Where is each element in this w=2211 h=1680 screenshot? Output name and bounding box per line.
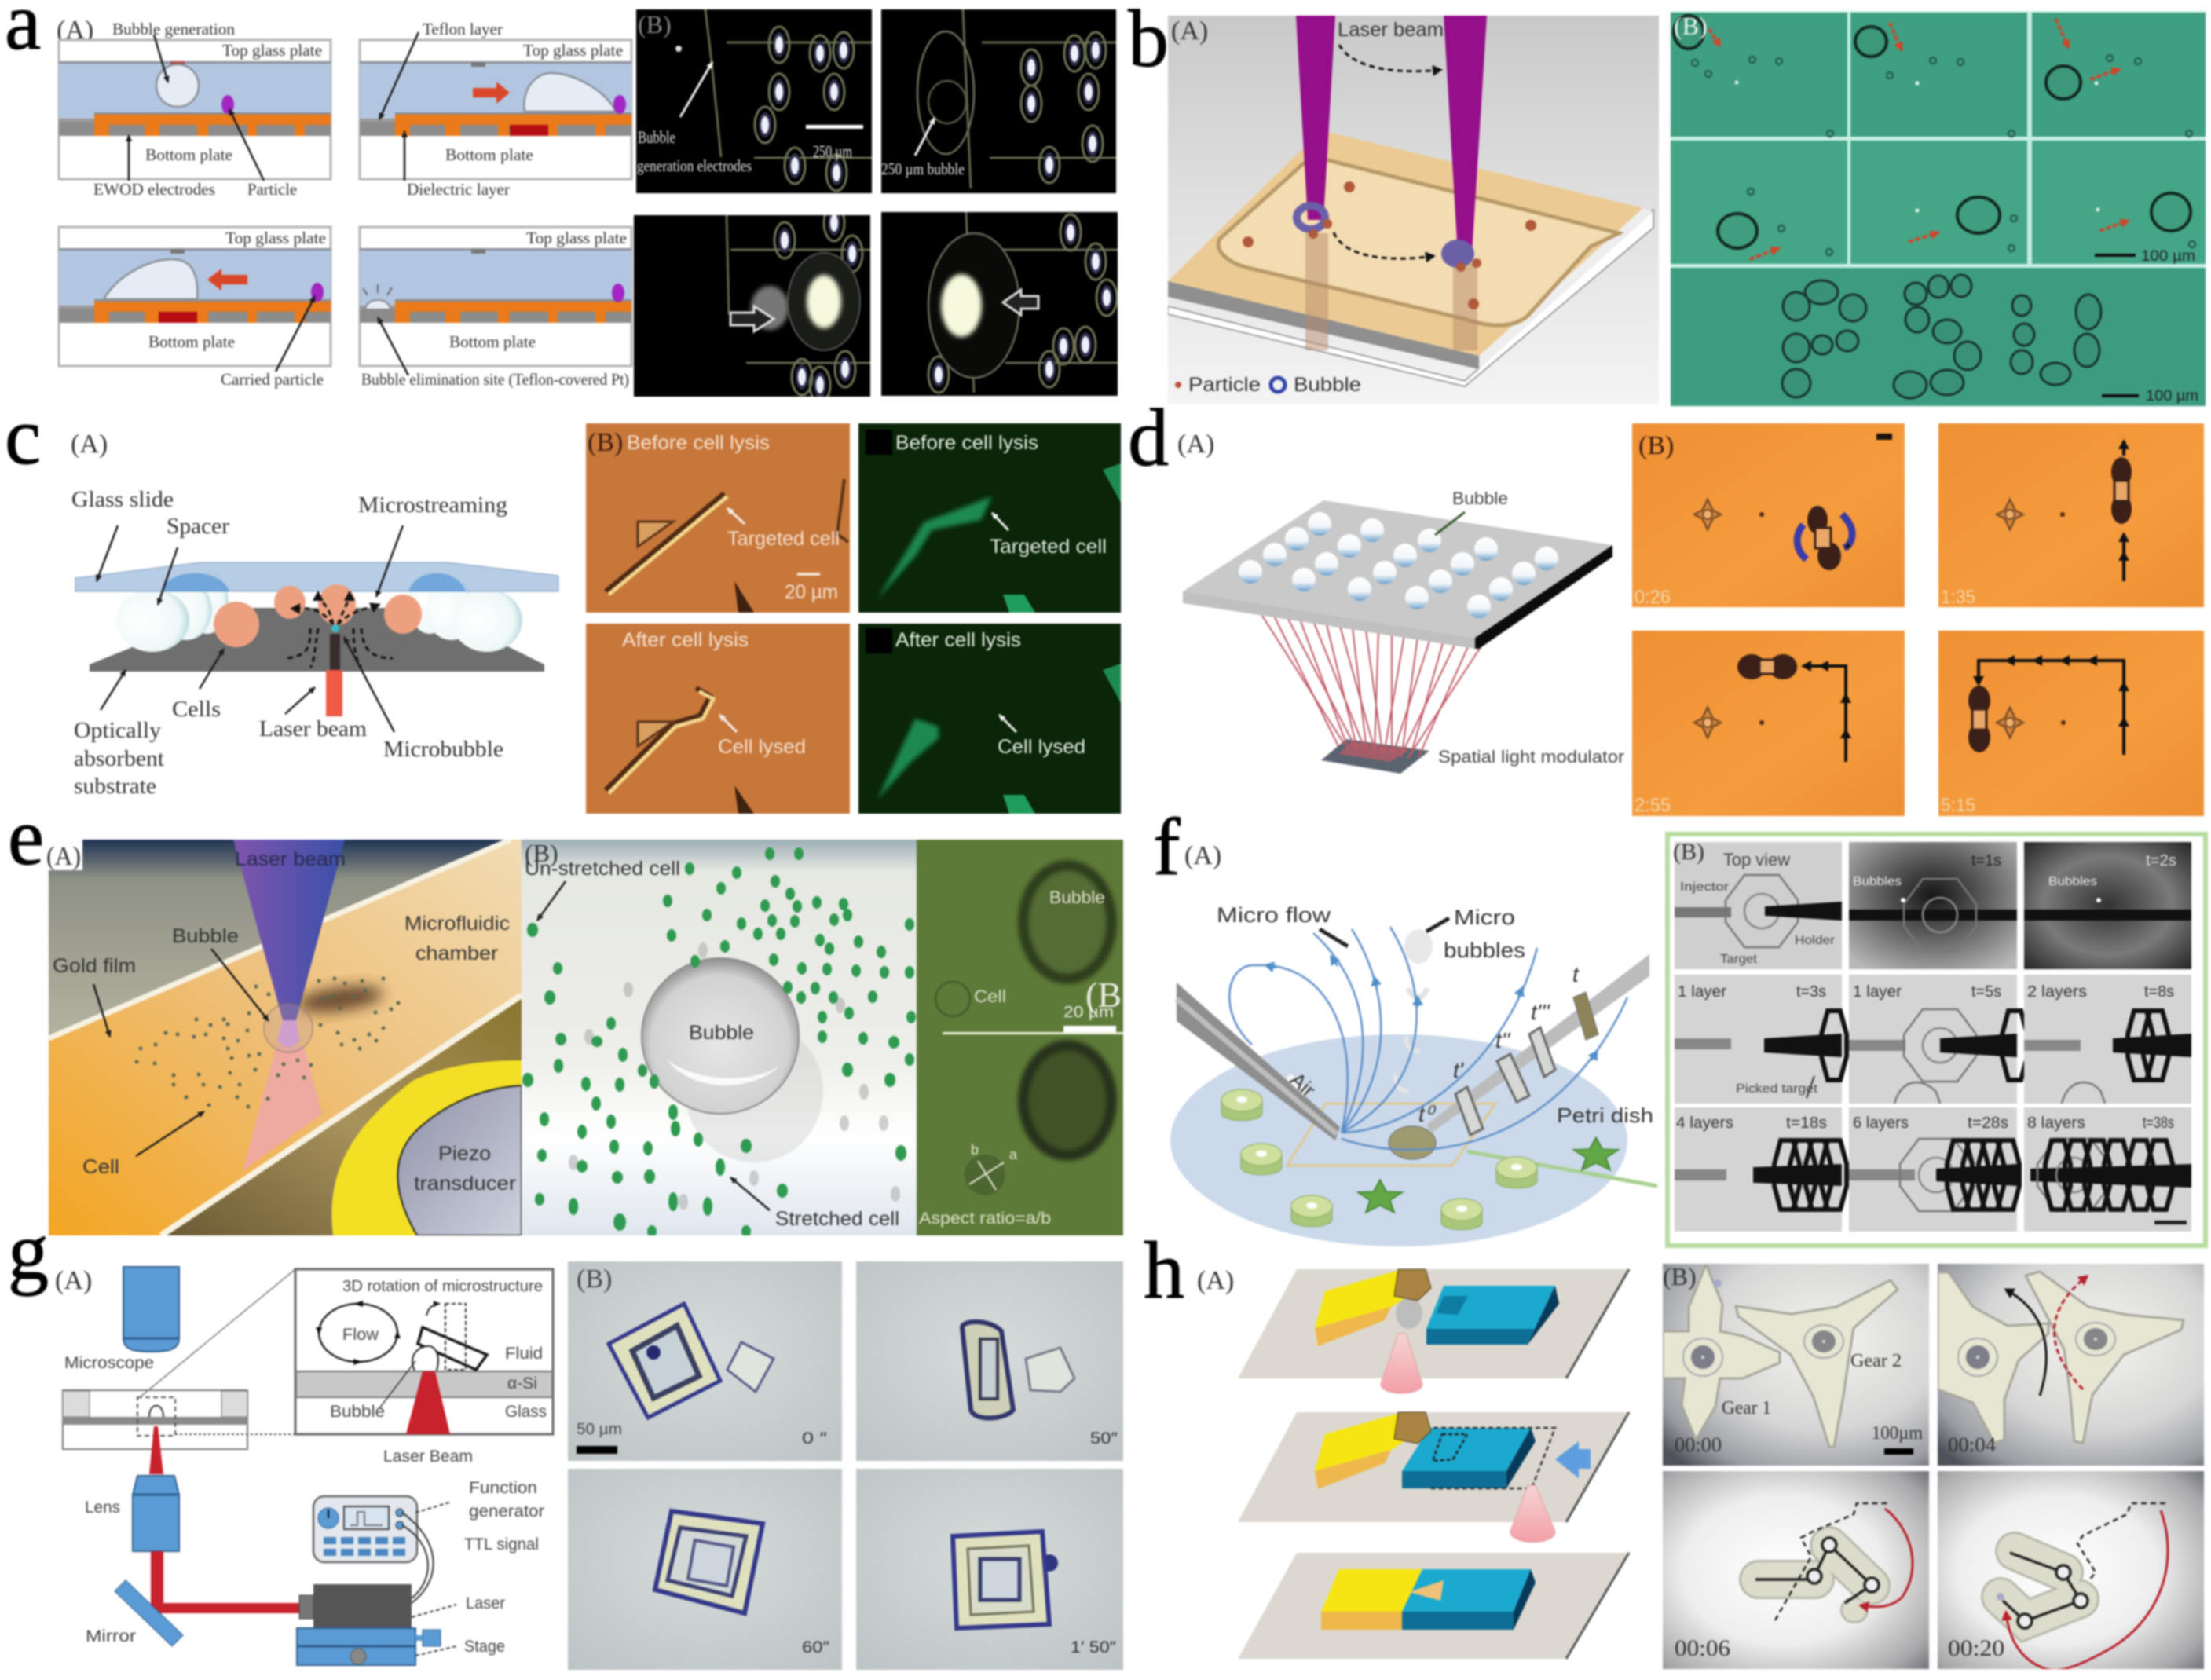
- schematic: bubble moving right: [360, 20, 631, 199]
- schematic: bubble generation: Bubble generation: [112, 20, 235, 38]
- photo: aspect ratio microscopy: b: [971, 1142, 979, 1158]
- letter h: h: [1144, 1225, 1184, 1316]
- schematic: microstreaming: [71, 488, 558, 799]
- schematic: microscope setup: Mirror: [86, 1627, 136, 1645]
- photo: after lysis fluorescence: Cell lysed: [998, 736, 1085, 758]
- schematic: bubble generation: Bottom plate: [145, 145, 232, 164]
- photo: aspect ratio microscopy: Aspect ratio=a/b: [919, 1210, 1051, 1228]
- photo: aspect ratio microscopy: (B: [1085, 975, 1122, 1015]
- frame: 8 layers t=38s: [2024, 1107, 2191, 1232]
- photo: before lysis brightfield: Before cell lysis: [627, 432, 770, 454]
- schematic: microstreaming: Glass slide: [71, 488, 174, 512]
- schematic: microstreaming: substrate: [74, 774, 156, 799]
- schematic: bubble moving left: Carried particle: [221, 370, 324, 389]
- photo: aspect ratio microscopy: Cell: [974, 986, 1006, 1006]
- panel a: [5, 0, 1118, 403]
- inset: 3D rotation: Fluid: [505, 1345, 543, 1363]
- frame: 2 layers t=8s: [2024, 975, 2191, 1104]
- photo: 0 seconds: 0 ″: [802, 1429, 828, 1448]
- schematic: assembly step 2: [1238, 1412, 1629, 1543]
- photo: aspect ratio microscopy: a: [1009, 1147, 1018, 1162]
- schematic: acoustic laser chamber: Microfluidic: [404, 913, 510, 935]
- schematic: bubble moving right: Top glass plate: [523, 41, 623, 60]
- frame: t=1s: [1849, 842, 2017, 969]
- frame: 4 layers t=18s: 4 layers: [1676, 1115, 1733, 1132]
- photo: before lysis brightfield: (B): [588, 428, 623, 457]
- frame: top view: Injector: [1680, 880, 1730, 894]
- photo: 1:35 move up: [1937, 422, 2206, 609]
- schematic: assembly step 1: [1238, 1269, 1629, 1393]
- label A: (A): [1197, 1266, 1234, 1295]
- frame: 8 layers t=38s: 8 layers: [2027, 1115, 2085, 1132]
- inset: 3D rotation: α-Si: [507, 1374, 537, 1393]
- frame: top view: Top view: [1723, 850, 1790, 869]
- photo: generation electrodes: Bubble: [638, 127, 675, 147]
- photo: aspect ratio microscopy: [915, 838, 1125, 1237]
- schematic: microscope setup: [63, 1267, 544, 1665]
- photo: gears 00:04: [1936, 1263, 2206, 1467]
- frame: 4 layers t=18s: [1675, 1107, 1847, 1232]
- letter e: e: [8, 792, 44, 882]
- frame: 6 layers t=28s: t=28s: [1968, 1115, 2008, 1132]
- frame: 4 layers t=18s: t=18s: [1786, 1115, 1827, 1132]
- schematic: bubble moving left: Bottom plate: [148, 332, 235, 351]
- schematic: bubble generation: [59, 20, 331, 199]
- photo: gears 00:00: Gear 1: [1722, 1398, 1771, 1418]
- schematic: bubble moving right: Teflon layer: [423, 20, 503, 38]
- schematic: acoustic laser chamber: transducer: [414, 1173, 516, 1195]
- schematic: petri dish pick-up: bubbles: [1444, 939, 1525, 962]
- photo: 1 min 50 seconds: [855, 1468, 1124, 1671]
- schematic: microscope setup: TTL signal: [464, 1535, 539, 1554]
- photo: 2:55 move left: 2:55: [1634, 795, 1671, 816]
- letter g: g: [8, 1206, 49, 1297]
- label A: (A): [55, 1266, 92, 1295]
- schematic: petri dish pick-up: [1170, 903, 1657, 1246]
- letter c: c: [5, 391, 41, 481]
- photo: before lysis brightfield: Targeted cell: [727, 528, 840, 550]
- photo: after lysis brightfield: Cell lysed: [718, 736, 806, 758]
- photo: before lysis fluorescence: [857, 422, 1122, 614]
- photo: gears 00:20: 00:20: [1948, 1635, 2004, 1661]
- schematic: microscope setup: Stage: [464, 1638, 505, 1656]
- inset: 3D rotation: Bubble: [330, 1403, 385, 1421]
- photo: 2:55 move left: [1631, 629, 1906, 818]
- schematic: microstreaming: Spacer: [167, 514, 230, 539]
- schematic: microscope setup: Function: [469, 1479, 537, 1497]
- schematic: bubble elimination: Bottom plate: [449, 332, 536, 351]
- inset: 3D rotation: 3D rotation of microstructure: [342, 1278, 543, 1295]
- photo: generation electrodes: 250 µm: [813, 141, 852, 161]
- schematic: assembly step 3: [1238, 1553, 1629, 1659]
- frame: 1 layer t=5s: [1849, 975, 2027, 1104]
- photo: after lysis brightfield: After cell lysis: [622, 629, 749, 651]
- illustration: cells around bubble: Un-stretched cell: [525, 858, 680, 880]
- photo: 5:15 move down: [1937, 629, 2206, 818]
- schematic: petri dish pick-up: t': [1453, 1058, 1465, 1082]
- schematic: bubble array and SLM: Bubble: [1452, 489, 1508, 508]
- schematic: bubble moving right: Bottom plate: [445, 145, 533, 164]
- photo: 0:26 rotation: [1631, 422, 1906, 609]
- label A: (A): [1171, 16, 1208, 46]
- schematic: bubble elimination: Top glass plate: [526, 229, 627, 247]
- photo: gears 00:00: Gear 2: [1850, 1351, 1902, 1371]
- schematic: microstreaming: Laser beam: [259, 717, 367, 741]
- photo grid: bubble trapping: 100 µm: [2146, 388, 2198, 404]
- photo: 1:35 move up: 1:35: [1941, 587, 1975, 608]
- frame: t=1s: Bubbles: [1853, 875, 1902, 888]
- schematic: microstreaming: Microstreaming: [358, 493, 507, 518]
- panel g: [8, 1206, 1123, 1670]
- schematic: bubble moving left: Top glass plate: [225, 229, 326, 247]
- photo: 50 seconds: [855, 1261, 1124, 1462]
- photo: 250 um bubble: 250 µm bubble: [881, 159, 965, 178]
- schematic: laser beam chip: [1167, 14, 1660, 403]
- frame: 2 layers t=8s: t=8s: [2144, 983, 2174, 1001]
- schematic: laser beam chip: Laser beam: [1338, 19, 1444, 41]
- photo: gears 00:04: 00:04: [1948, 1433, 1996, 1456]
- photo: gears 00:00: (B): [1663, 1262, 1697, 1290]
- schematic: laser beam chip: Particle: [1188, 374, 1261, 396]
- frame: 1 layer t=5s: 1 layer: [1853, 983, 1902, 1001]
- frame: t=2s: t=2s: [2146, 852, 2176, 869]
- photo: 60 seconds: 60″: [802, 1638, 830, 1656]
- photo: bubble moves right: [632, 214, 872, 398]
- photo: 0 seconds: [567, 1261, 843, 1462]
- panel d: [1128, 393, 2204, 816]
- photo: 50 seconds: 50″: [1090, 1429, 1118, 1448]
- photo: after lysis brightfield: [584, 622, 851, 815]
- photo: before lysis fluorescence: Targeted cell: [990, 536, 1107, 558]
- inset: 3D rotation: Flow: [342, 1326, 379, 1344]
- photo: 0 seconds: (B): [577, 1265, 612, 1294]
- illustration: cells around bubble: Stretched cell: [775, 1208, 899, 1230]
- photo grid: layer stacking: [1667, 834, 2206, 1246]
- photo: generation electrodes: (B): [638, 10, 672, 38]
- frame: 6 layers t=28s: 6 layers: [1853, 1115, 1909, 1132]
- photo: generation electrodes: generation electrodes: [637, 156, 752, 175]
- photo: before lysis brightfield: [584, 422, 851, 614]
- photo grid: bubble trapping: [1671, 11, 2206, 406]
- schematic: bubble array and SLM: Spatial light modulator: [1438, 747, 1624, 767]
- photo: 0:26 rotation: 0:26: [1634, 587, 1671, 608]
- inset: 3D rotation: Laser Beam: [383, 1448, 473, 1466]
- label A: (A): [57, 16, 93, 45]
- frame: t=2s: Bubbles: [2048, 875, 2097, 888]
- photo: gears 00:06: 00:06: [1675, 1635, 1730, 1661]
- photo grid: bubble trapping: (B): [1674, 12, 1708, 40]
- photo: before lysis fluorescence: Before cell lysis: [895, 432, 1038, 454]
- photo: before lysis brightfield: 20 µm: [785, 581, 838, 603]
- label A: (A): [71, 430, 108, 459]
- illustration: cells around bubble: [520, 839, 917, 1237]
- schematic: petri dish pick-up: t⁰: [1418, 1102, 1437, 1126]
- schematic: acoustic laser chamber: Gold film: [53, 955, 136, 977]
- photo: bubble moves left: [880, 210, 1119, 397]
- photo: gears 00:00: [1661, 1262, 1931, 1467]
- frame: 1 layer t=3s: t=3s: [1796, 983, 1826, 1001]
- photo: aspect ratio microscopy: 20 µm: [1063, 1004, 1114, 1021]
- photo: 5:15 move down: 5:15: [1941, 795, 1975, 816]
- frame: top view: [1673, 839, 1842, 969]
- frame: 2 layers t=8s: 2 layers: [2027, 983, 2087, 1001]
- photo: 60 seconds: [567, 1468, 843, 1671]
- inset: 3D rotation: [295, 1269, 553, 1466]
- schematic: bubble generation: EWOD electrodes: [93, 180, 215, 199]
- photo: aspect ratio microscopy: Bubble: [1049, 888, 1105, 907]
- frame: 1 layer t=5s: t=5s: [1971, 983, 2001, 1001]
- schematic: laser beam chip: Bubble: [1294, 374, 1361, 396]
- schematic: microstreaming: Microbubble: [383, 738, 503, 762]
- label A: (A): [1184, 841, 1221, 870]
- schematic: petri dish pick-up: Air: [1286, 1067, 1320, 1102]
- panel f: [1153, 802, 2206, 1246]
- schematic: microscope setup: Laser: [466, 1594, 505, 1612]
- panel h: [1144, 1225, 2204, 1670]
- photo: 0 seconds: 50 µm: [577, 1421, 622, 1438]
- frame: 1 layer t=3s: 1 layer: [1678, 983, 1726, 1001]
- schematic: microstreaming: Cells: [172, 697, 221, 722]
- photo: 0:26 rotation: (B): [1638, 431, 1674, 460]
- inset: 3D rotation: Glass: [505, 1403, 547, 1421]
- schematic: acoustic laser chamber: Cell: [82, 1156, 119, 1178]
- label A: (A): [1177, 430, 1214, 459]
- schematic: microscope setup: Microscope: [64, 1354, 154, 1372]
- schematic: petri dish pick-up: t'': [1495, 1028, 1511, 1052]
- schematic: acoustic laser chamber: chamber: [415, 942, 498, 964]
- schematic: acoustic laser chamber: Piezo: [438, 1143, 491, 1165]
- frame: 8 layers t=38s: t=38s: [2143, 1115, 2174, 1132]
- schematic: acoustic laser chamber: Bubble: [172, 925, 239, 947]
- frame: top view: Holder: [1795, 934, 1836, 947]
- panel e: [8, 792, 1123, 1238]
- schematic: bubble moving right: Dielectric layer: [407, 180, 510, 199]
- schematic: bubble generation: Particle: [247, 180, 297, 199]
- schematic: petri dish pick-up: Micro: [1454, 906, 1515, 929]
- letter d: d: [1128, 393, 1169, 483]
- frame: top view: (B): [1673, 839, 1704, 865]
- schematic: bubble elimination: Bubble elimination site (Teflon-covered Pt): [361, 370, 629, 389]
- photo grid: bubble trapping: 100 µm: [2141, 248, 2195, 265]
- letter f: f: [1153, 802, 1181, 892]
- schematic: petri dish pick-up: Petri dish: [1557, 1104, 1653, 1127]
- photo: gears 00:00: 00:00: [1675, 1433, 1722, 1456]
- label A on white tab: (A): [46, 842, 81, 871]
- schematic: bubble array and SLM: [1183, 489, 1624, 774]
- schematic: petri dish pick-up: t''': [1531, 1000, 1550, 1024]
- photo: 250 um bubble: [880, 8, 1118, 195]
- frame: 6 layers t=28s: [1849, 1107, 2019, 1232]
- photo: generation electrodes: [635, 8, 873, 195]
- frame: t=2s: [2024, 842, 2191, 969]
- schematic: petri dish pick-up: t: [1572, 962, 1580, 986]
- schematic: microstreaming: Optically: [74, 719, 161, 743]
- schematic: microscope setup: generator: [469, 1502, 544, 1521]
- frame: 1 layer t=3s: Picked target: [1736, 1082, 1818, 1096]
- illustration: cells around bubble: (B): [525, 839, 558, 867]
- photo: 1 min 50 seconds: 1′ 50″: [1071, 1638, 1117, 1656]
- panel b: [1128, 0, 2206, 406]
- photo: gears 00:20: [1937, 1470, 2206, 1671]
- schematic: acoustic laser chamber: [47, 838, 523, 1237]
- panel c: [5, 391, 1121, 814]
- frame: 1 layer t=3s: [1675, 975, 1847, 1104]
- schematic: microscope setup: Lens: [85, 1499, 120, 1517]
- photo: after lysis fluorescence: After cell lysis: [895, 629, 1021, 651]
- schematic: bubble generation: Top glass plate: [222, 41, 322, 60]
- frame: t=1s: t=1s: [1971, 852, 2001, 869]
- frame: top view: Target: [1720, 953, 1758, 966]
- schematic: microstreaming: absorbent: [74, 747, 164, 771]
- photo: gears 00:06: [1662, 1470, 1931, 1670]
- photo: after lysis fluorescence: [857, 622, 1122, 815]
- schematic: acoustic laser chamber: Laser beam: [235, 848, 346, 870]
- photo: gears 00:00: 100µm: [1872, 1423, 1923, 1444]
- illustration: cells around bubble: Bubble: [689, 1022, 754, 1044]
- schematic: petri dish pick-up: Micro flow: [1217, 903, 1331, 927]
- schematic: bubble moving left: [59, 227, 331, 389]
- schematic: bubble elimination: [360, 227, 631, 389]
